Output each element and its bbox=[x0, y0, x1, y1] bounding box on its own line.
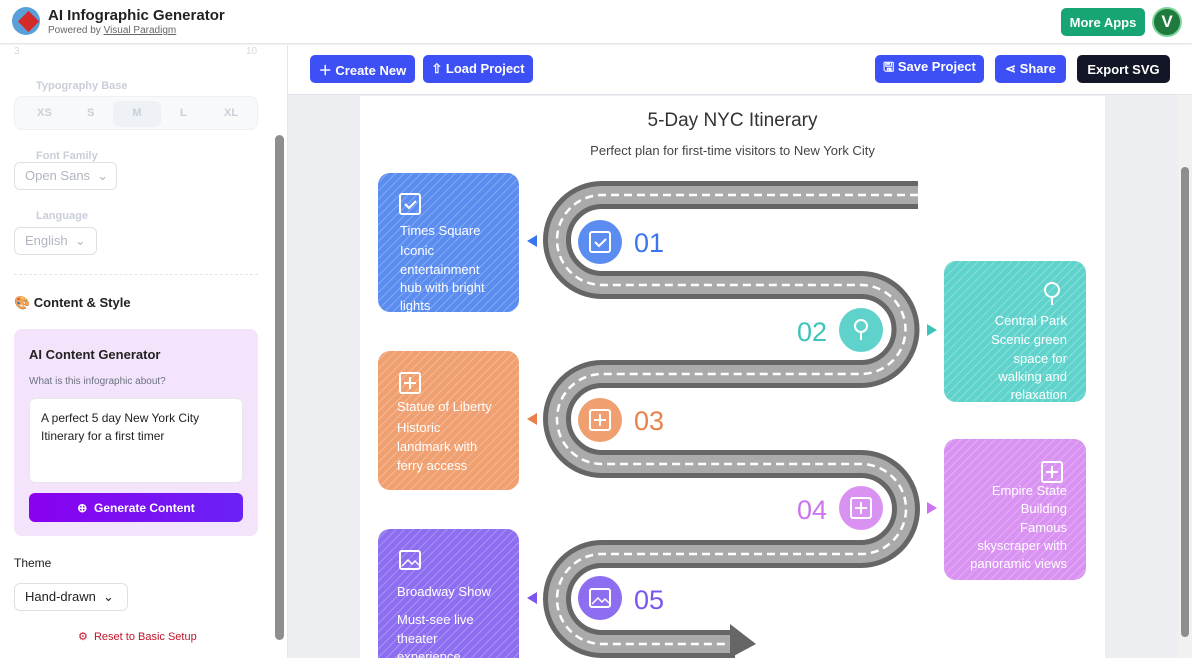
sidebar: M bbox=[132, 107, 142, 119]
card 2: central park: walking and bbox=[997, 369, 1067, 384]
panel: AI content generator: What is this infographic about? bbox=[29, 376, 166, 387]
card 1: times square: Times Square bbox=[400, 223, 480, 238]
card 4: empire state: skyscraper with bbox=[977, 538, 1067, 553]
sidebar: XL bbox=[224, 107, 238, 119]
card 4: empire state: Empire State bbox=[992, 483, 1067, 498]
subtitle: Perfect plan for first-time visitors to New York City bbox=[590, 143, 875, 158]
text: ⇧ Load Project bbox=[431, 61, 525, 76]
text: ⋖ Share bbox=[1005, 61, 1056, 76]
theme: Theme bbox=[14, 556, 51, 570]
panel: AI content generator: A perfect 5 day New York City Itinerary for a first timer bbox=[41, 411, 199, 443]
language: Language bbox=[36, 210, 88, 222]
right scrollbar bbox=[1178, 95, 1192, 658]
subtitle: Powered by Visual Paradigm bbox=[48, 25, 176, 36]
buttons: ＋ Create New bbox=[319, 62, 406, 78]
marker 02: 02 bbox=[797, 317, 827, 347]
text: Export SVG bbox=[1087, 62, 1160, 76]
card 2: central park: Central Park bbox=[995, 313, 1067, 328]
road bbox=[557, 195, 918, 658]
typography base: Typography Base bbox=[36, 80, 128, 92]
card 1: times square: Iconic bbox=[400, 243, 434, 258]
button: more apps: More Apps bbox=[1070, 14, 1136, 30]
sidebar: Hand-drawn ⌄ bbox=[25, 589, 114, 604]
marker 05 bbox=[578, 576, 664, 620]
title: 5-Day NYC Itinerary bbox=[648, 110, 818, 131]
sidebar: 3 bbox=[14, 46, 20, 57]
panel: AI content generator: AI Content Generator bbox=[29, 347, 160, 362]
marker 01 bbox=[578, 220, 664, 264]
card 3: statue of liberty: Historic bbox=[397, 420, 441, 435]
card 1: times square bbox=[378, 173, 537, 313]
card 4: empire state: Famous bbox=[1020, 520, 1067, 535]
card 3: statue of liberty: Statue of Liberty bbox=[397, 399, 492, 414]
card 4: empire state bbox=[927, 439, 1086, 580]
card 2: central park: space for bbox=[1014, 351, 1068, 366]
card 3: statue of liberty bbox=[378, 351, 537, 490]
card 5: broadway: Broadway Show bbox=[397, 584, 492, 599]
panel: AI content generator bbox=[14, 329, 258, 536]
marker 05: 05 bbox=[634, 585, 664, 615]
card 3: statue of liberty: landmark with bbox=[397, 439, 477, 454]
card 2: central park: relaxation bbox=[1011, 387, 1067, 402]
font family: Font Family bbox=[36, 150, 98, 162]
heading: content & style: 🎨 Content & Style bbox=[14, 295, 131, 310]
card 4: empire state: Building bbox=[1021, 501, 1067, 516]
header bbox=[0, 0, 1192, 44]
panel: AI content generator: ⊕ Generate Content bbox=[77, 500, 195, 514]
card 2: central park bbox=[927, 261, 1086, 402]
avatar: V bbox=[1161, 12, 1173, 31]
card 4: empire state: panoramic views bbox=[970, 556, 1067, 571]
button: more apps bbox=[1061, 8, 1145, 36]
sidebar: English ⌄ bbox=[25, 233, 86, 248]
marker 01: 01 bbox=[634, 228, 664, 258]
card 5: broadway bbox=[378, 529, 537, 658]
card 3: statue of liberty: ferry access bbox=[397, 458, 468, 473]
icon: logo bbox=[12, 7, 40, 35]
main area bbox=[288, 45, 1192, 658]
sidebar: L bbox=[180, 107, 187, 119]
sidebar: S bbox=[87, 107, 94, 119]
buttons bbox=[310, 55, 415, 83]
text: 🖫 Save Project bbox=[883, 59, 976, 74]
sidebar: 10 bbox=[246, 46, 257, 57]
avatar bbox=[1152, 7, 1182, 37]
sidebar: Open Sans ⌄ bbox=[25, 168, 108, 183]
marker 04: 04 bbox=[797, 495, 827, 525]
marker 02 bbox=[797, 308, 883, 352]
card 5: broadway: theater bbox=[397, 631, 438, 646]
card 5: broadway: Must-see live bbox=[397, 612, 474, 627]
marker 04 bbox=[797, 486, 883, 530]
sidebar: XS bbox=[37, 107, 52, 119]
card 2: central park: Scenic green bbox=[991, 332, 1067, 347]
marker 03 bbox=[578, 398, 664, 442]
app title: AI Infographic Generator bbox=[48, 7, 225, 24]
card 1: times square: lights bbox=[400, 298, 431, 313]
card 1: times square: entertainment bbox=[400, 262, 480, 277]
scrollbar bbox=[275, 135, 284, 640]
reset link: ⚙ Reset to Basic Setup bbox=[78, 631, 197, 643]
card 1: times square: hub with bright bbox=[400, 280, 485, 295]
toolbar bbox=[288, 45, 1192, 95]
marker 03: 03 bbox=[634, 406, 664, 436]
sidebar bbox=[0, 45, 288, 658]
paper bbox=[360, 96, 1105, 658]
